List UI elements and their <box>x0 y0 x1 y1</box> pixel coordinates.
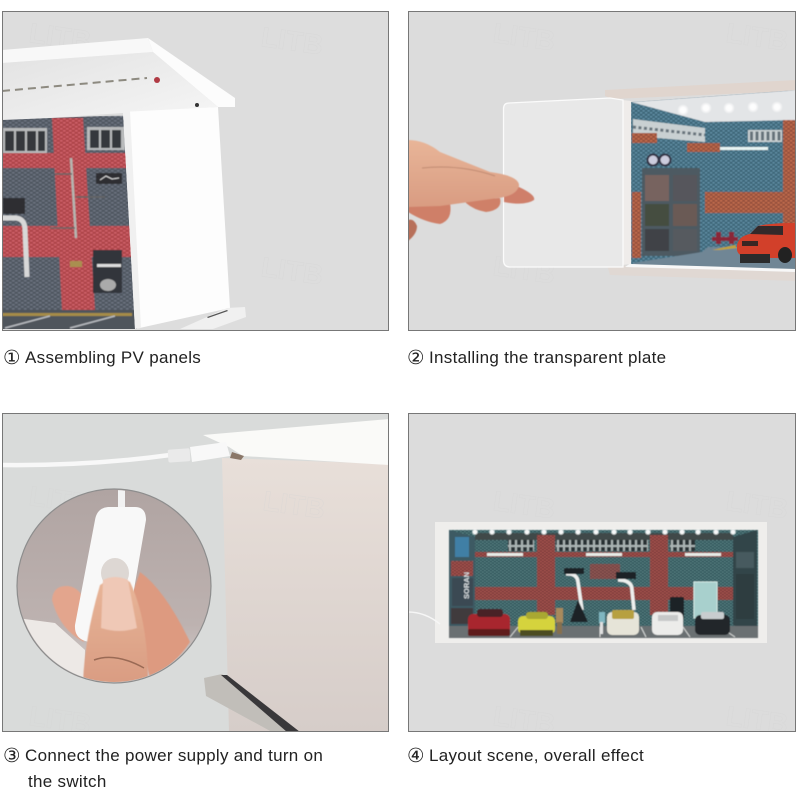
watermarks panel 2: LITB <box>491 250 557 290</box>
watermarks panel 4 <box>491 485 790 740</box>
watermarks panel 4: LITB <box>724 700 790 740</box>
orange bands <box>632 120 800 258</box>
watermarks panel 1 <box>27 17 325 291</box>
back fingers <box>52 572 190 678</box>
watermarks panel 2: LITB <box>491 17 557 57</box>
horizontal brick bands <box>475 552 733 600</box>
ceiling lights row <box>471 528 737 536</box>
watermarks panel 2: LITB <box>724 17 790 57</box>
panel: step 1 assembling PV panels <box>2 11 389 331</box>
hand holding the plate <box>408 140 534 241</box>
LED strip <box>2 77 199 107</box>
caption 3: Connect the power supply and turn on <box>25 746 323 765</box>
floor <box>449 626 758 638</box>
power cord <box>408 612 440 624</box>
ceiling lights <box>678 102 782 116</box>
inner side strip <box>624 100 631 265</box>
caption 3: the switch <box>28 772 107 791</box>
ceiling <box>631 90 796 122</box>
red car <box>468 609 510 636</box>
watermarks panel 4: LITB <box>724 485 790 525</box>
caption 4: Layout scene, overall effect <box>429 746 644 765</box>
power cable and plug <box>2 442 244 465</box>
pipes on wall <box>2 158 105 277</box>
caption 1: ① <box>3 346 20 369</box>
watermarks panel 1: LITB <box>259 21 325 61</box>
red brick columns <box>537 535 668 615</box>
box bottom rail <box>607 265 796 281</box>
floor <box>632 246 795 269</box>
transparent plate <box>504 98 623 267</box>
exhaust pipes <box>566 574 634 610</box>
lit diorama interior <box>631 90 800 272</box>
red stand <box>712 232 738 244</box>
figures <box>556 608 605 634</box>
graffiti <box>3 173 122 293</box>
watermarks panel 1: LITB <box>259 251 325 291</box>
lid top edge <box>2 38 153 63</box>
left wall windows <box>633 119 705 142</box>
upper dark wall strip <box>475 533 733 540</box>
base plate <box>204 674 300 732</box>
right window <box>87 127 125 150</box>
yellow car <box>518 612 555 636</box>
box top rail <box>605 80 796 99</box>
floor <box>2 310 137 331</box>
switch button <box>101 558 129 588</box>
inset table edge <box>17 618 85 690</box>
box top face <box>203 419 389 465</box>
garage diorama <box>449 530 758 638</box>
caption 1: Assembling PV panels <box>25 348 201 367</box>
panel: step 4 layout scene overall effect <box>408 413 796 740</box>
thumb <box>83 579 148 685</box>
watermarks panel 2 <box>491 17 790 290</box>
tool rack <box>642 154 700 256</box>
left window <box>3 128 47 153</box>
graffiti pieces <box>564 568 684 622</box>
caption 3: ③ <box>3 744 20 767</box>
left wall <box>449 530 475 636</box>
wall light bars <box>487 553 721 556</box>
inset cable <box>118 488 125 510</box>
watermarks panel 3: LITB <box>27 700 93 740</box>
caption 3 <box>3 744 323 791</box>
base tab <box>180 307 246 329</box>
watermarks panel 1: LITB <box>27 17 93 57</box>
red car <box>737 223 796 263</box>
switch body <box>75 507 146 644</box>
watermarks panel 4: LITB <box>491 700 557 740</box>
left wall: SORAN <box>462 572 471 599</box>
caption 2: Installing the transparent plate <box>429 348 666 367</box>
windows <box>508 540 695 551</box>
white muscle car <box>607 610 639 635</box>
inset circle switch <box>17 488 211 690</box>
caption 2: ② <box>407 346 424 369</box>
white side panel <box>123 107 230 329</box>
door <box>694 582 717 618</box>
caption 4: ④ <box>407 744 424 767</box>
display case shell <box>435 522 767 643</box>
watermarks panel 3: LITB <box>27 480 93 520</box>
lid right face <box>148 38 235 107</box>
dark car <box>695 612 730 635</box>
watermarks panel 3 <box>27 480 93 740</box>
wall light bar <box>720 147 768 150</box>
lid underside <box>2 52 218 121</box>
panel: step 3 connect the power supply <box>2 413 389 740</box>
watermark on box: LITB <box>261 485 327 525</box>
watermarks panel 4: LITB <box>491 485 557 525</box>
back wall window <box>748 130 782 142</box>
panel: step 2 installing the transparent plate <box>408 11 800 331</box>
white car <box>652 612 683 635</box>
right wall <box>733 530 757 636</box>
box front face <box>222 458 389 732</box>
brick wall diorama <box>2 116 142 331</box>
